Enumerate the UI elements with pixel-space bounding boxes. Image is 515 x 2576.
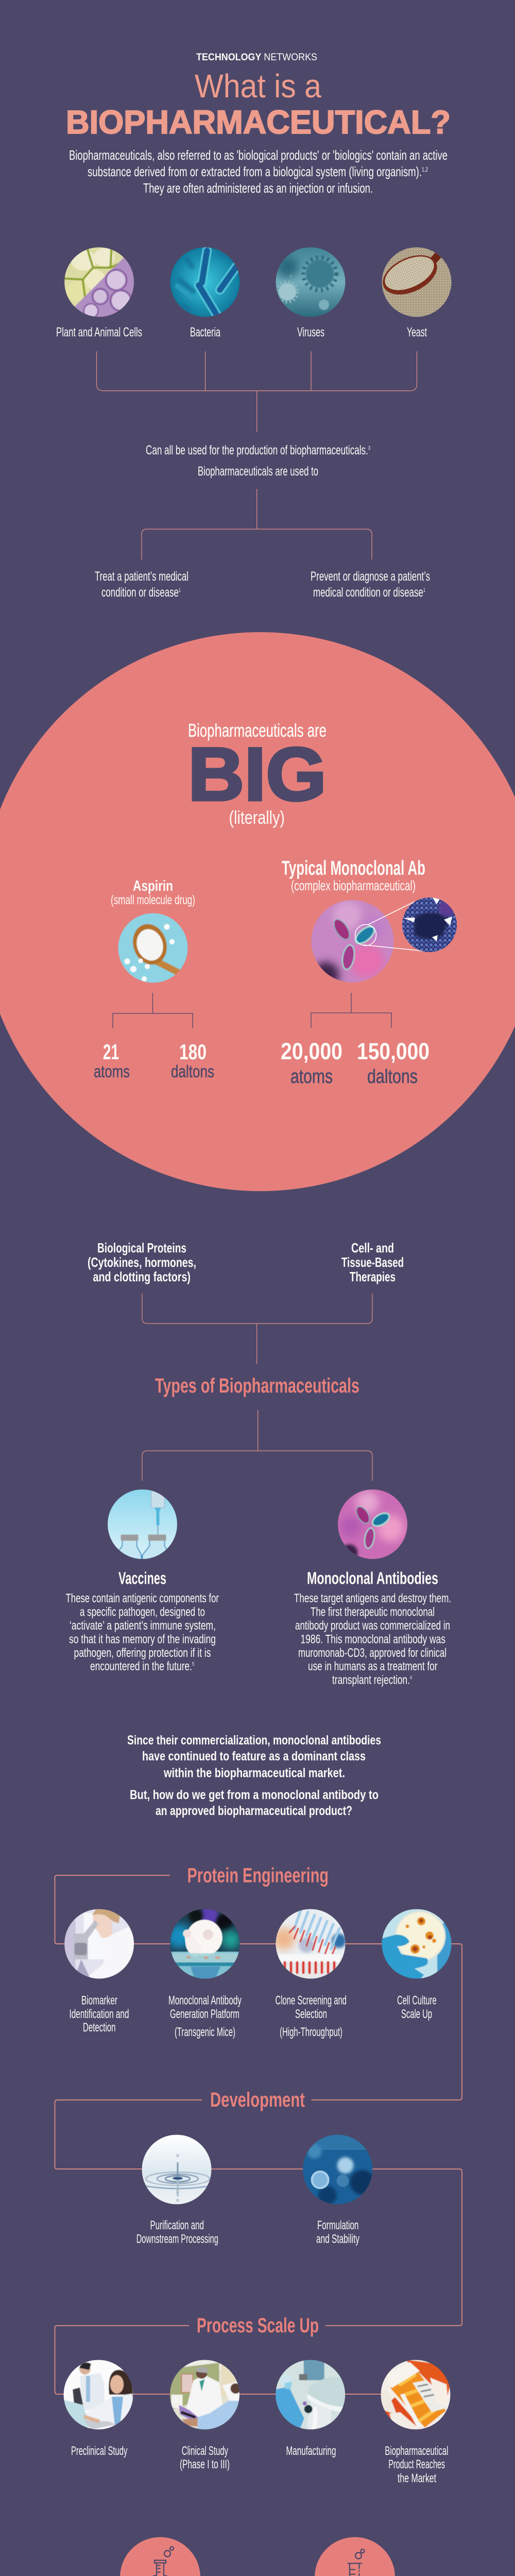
photo: petri dish and glove	[381, 1909, 453, 1980]
text: vaccines description: a specific pathogen, designed to	[80, 1605, 205, 1619]
title: BIOPHARMACEUTICAL?	[66, 104, 451, 141]
labels: protein engineering steps: Scale Up	[401, 2007, 432, 2021]
labels: source organisms: Plant and Animal Cells	[56, 325, 142, 340]
heading: typical monoclonal ab: Typical Monoclonal Ab	[282, 857, 425, 879]
labels: development steps: and Stability	[316, 2232, 359, 2246]
text: monoclonal antibodies description: muromonab-CD3, approved for clinical	[298, 1646, 447, 1660]
text: monoclonal antibodies description: 1986. This monoclonal antibody was	[301, 1632, 445, 1647]
text: monoclonal antibodies description: antibody product was commercialized in	[295, 1619, 450, 1633]
connector: out of types	[142, 1410, 372, 1481]
heading: aspirin: (small molecule drug)	[111, 893, 195, 907]
photo: water drop	[142, 2134, 212, 2205]
labels: protein engineering steps: Monoclonal Antibody	[168, 1994, 242, 2008]
text: market statement: But, how do we get from a monoclonal antibody to	[130, 1788, 379, 1802]
photo: biomarker scientist	[64, 1908, 135, 1980]
text: monoclonal antibodies description: transplant rejection.	[332, 1673, 440, 1687]
text: cell and tissue therapies: Tissue-Based	[341, 1255, 404, 1270]
text: monoclonal antibodies description: The first therapeutic monoclonal	[311, 1605, 435, 1619]
photo: pill bottle	[380, 2360, 452, 2431]
text: biological proteins: and clotting factors)	[93, 1269, 191, 1284]
intro paragraph	[69, 147, 448, 196]
heading: types of biopharmaceuticals: Types of Biopharmaceuticals	[155, 1375, 359, 1397]
photo: manufacturing	[276, 2360, 346, 2431]
labels: process scale up steps: Biopharmaceutical	[385, 2444, 448, 2458]
labels: protein engineering steps	[69, 1994, 437, 2039]
photo: bacteria	[170, 247, 240, 317]
text: vaccines description: These contain antigenic components for	[66, 1591, 219, 1605]
text: market statement: have continued to feature as a dominant class	[142, 1749, 366, 1764]
text: cell and tissue therapies: Therapies	[350, 1269, 396, 1284]
photo: clinical study	[170, 2360, 241, 2431]
labels: process scale up steps: Product Reaches	[388, 2458, 445, 2471]
text: market statement: an approved biopharmaceutical product?	[156, 1804, 352, 1818]
stat: 20,000 atoms	[281, 1038, 342, 1088]
connector: process path	[55, 1875, 462, 2394]
labels: protein engineering steps: Clone Screening and	[275, 1994, 347, 2008]
title: What is a	[195, 67, 321, 105]
heading: process scale up: Process Scale Up	[197, 2314, 319, 2337]
text: treat: condition or disease	[101, 585, 216, 600]
text: market statement: Since their commercialization, monoclonal antibodies	[127, 1733, 381, 1748]
text: prevent or diagnose: 1	[423, 587, 425, 594]
logo: Technology Networks: TECHNOLOGY NETWORKS	[196, 52, 317, 63]
text: biological proteins: Biological Proteins	[97, 1240, 186, 1256]
text: vaccines description: 5	[192, 1662, 194, 1667]
stat: 21 atoms: atoms	[94, 1062, 130, 1081]
photo: aspirin tablets	[118, 913, 188, 983]
labels: development steps	[136, 2218, 359, 2246]
labels: protein engineering steps: (High-Throughput)	[280, 2025, 342, 2039]
text: prevent or diagnose: medical condition or disease	[313, 585, 475, 600]
labels: protein engineering steps: Detection	[83, 2021, 115, 2035]
text: treat	[95, 569, 188, 600]
labels: protein engineering steps: Selection	[295, 2007, 327, 2021]
stat: 180 daltons: 180	[179, 1040, 207, 1064]
heading: vaccines: Vaccines	[118, 1568, 166, 1588]
stat: 20,000 atoms: 20,000	[281, 1038, 342, 1064]
text: cell and tissue therapies: Cell- and	[351, 1240, 394, 1256]
title	[66, 67, 451, 141]
photo: plant and animal cells	[64, 247, 135, 318]
text: vaccines description: pathogen, offering protection if it is	[74, 1646, 211, 1660]
photo: yeast	[376, 247, 452, 317]
text: prevent or diagnose: Prevent or diagnose a patient’s	[311, 569, 430, 584]
connector: aspirin figures	[113, 993, 193, 1028]
stat: 20,000 atoms: atoms	[290, 1066, 333, 1088]
text: production statement: Can all be used for the production of biopharmaceuticals.	[146, 443, 471, 457]
text: vaccines description: encountered in the future.	[90, 1659, 231, 1673]
heading: monoclonal antibodies: Monoclonal Antibodies	[307, 1568, 438, 1588]
labels: protein engineering steps: (Transgenic Mice)	[175, 2025, 235, 2039]
photo: preclinical scientists	[63, 2360, 134, 2430]
labels: process scale up steps: Manufacturing	[286, 2444, 336, 2458]
text: cell and tissue therapies	[341, 1240, 404, 1284]
stat: 21 atoms	[94, 1040, 130, 1081]
heading: aspirin: Aspirin	[133, 878, 173, 894]
text: monoclonal antibodies description: use in humans as a treatment for	[308, 1659, 438, 1673]
heading: biopharmaceuticals are big: Biopharmaceuticals are	[188, 720, 327, 741]
heading: typical monoclonal ab	[282, 857, 425, 893]
connector: four sources to production	[97, 351, 417, 432]
labels: process scale up steps: Preclinical Study	[71, 2444, 127, 2458]
labels: source organisms: Bacteria	[190, 325, 220, 340]
text: monoclonal antibodies description	[294, 1591, 451, 1687]
text: treat: 1	[179, 587, 181, 594]
intro paragraph: They are often administered as an injection or infusion.	[143, 180, 373, 196]
labels: development steps: Formulation	[317, 2218, 358, 2232]
text: market statement	[127, 1733, 381, 1818]
heading: biopharmaceuticals are big: BIG	[188, 732, 327, 816]
connector: antibody figures	[311, 993, 391, 1028]
icon: conical flask	[315, 2537, 395, 2576]
text: treat: Treat a patient’s medical	[95, 569, 188, 584]
photo: formulation lab	[303, 2134, 375, 2205]
photo: monoclonal antibody	[338, 1489, 408, 1561]
stat: 150,000 daltons	[357, 1038, 430, 1088]
heading: development: Development	[210, 2089, 305, 2111]
labels: protein engineering steps: Identification and	[69, 2007, 129, 2021]
labels: source organisms: Viruses	[297, 325, 324, 340]
labels: source organisms	[56, 325, 427, 340]
photo: viruses	[276, 247, 346, 317]
labels: process scale up steps: (Phase I to III)	[180, 2458, 230, 2471]
icon: round-bottom flask	[120, 2537, 200, 2576]
text: prevent or diagnose	[311, 569, 430, 600]
labels: protein engineering steps: Generation Platform	[170, 2007, 239, 2021]
labels: process scale up steps: the Market	[398, 2471, 436, 2485]
labels: protein engineering steps: Cell Culture	[397, 1994, 437, 2008]
text: vaccines description: ‘activate’ a patient’s immune system,	[70, 1619, 216, 1633]
stat: 21 atoms: 21	[103, 1040, 119, 1064]
heading: protein engineering: Protein Engineering	[187, 1864, 329, 1887]
text: biological proteins	[88, 1240, 196, 1284]
stat: 180 daltons	[171, 1040, 214, 1081]
photo: monoclonal antibody with magnifier	[311, 897, 457, 989]
connector: uses	[142, 489, 372, 560]
panel: big circle	[0, 632, 515, 1191]
photo: transgenic mouse	[170, 1909, 240, 1978]
text: monoclonal antibodies description: 4	[410, 1675, 412, 1681]
labels: process scale up steps	[71, 2444, 448, 2485]
labels: process scale up steps: Clinical Study	[182, 2444, 228, 2458]
stat: 150,000 daltons: 150,000	[357, 1038, 430, 1064]
text: vaccines description: so that it has memory of the invading	[69, 1632, 216, 1647]
text: vaccines description	[66, 1591, 219, 1673]
labels: protein engineering steps: Biomarker	[81, 1994, 117, 2008]
heading: aspirin	[111, 878, 195, 907]
labels: development steps: Purification and	[150, 2218, 204, 2232]
text: biological proteins: (Cytokines, hormones,	[88, 1255, 196, 1270]
text: market statement: within the biopharmaceutical market.	[163, 1766, 345, 1781]
intro paragraph: 1,2	[422, 166, 428, 173]
stat: 180 daltons: daltons	[171, 1062, 214, 1081]
photo: pipettes and plate	[272, 1909, 346, 1980]
text: production statement: Biopharmaceuticals are used to	[198, 464, 318, 479]
labels: source organisms: Yeast	[407, 325, 427, 340]
heading: typical monoclonal ab: (complex biopharmaceutical)	[291, 878, 416, 893]
connector: into types	[142, 1294, 372, 1364]
photo: vaccine vials	[107, 1489, 177, 1560]
text: monoclonal antibodies description: These target antigens and destroy them.	[294, 1591, 451, 1605]
text: production statement: 3	[368, 445, 370, 451]
text: production statement	[146, 443, 370, 479]
labels: development steps: Downstream Processing	[136, 2232, 218, 2246]
stat: 150,000 daltons: daltons	[367, 1066, 418, 1088]
heading: biopharmaceuticals are big: (literally)	[229, 807, 285, 828]
